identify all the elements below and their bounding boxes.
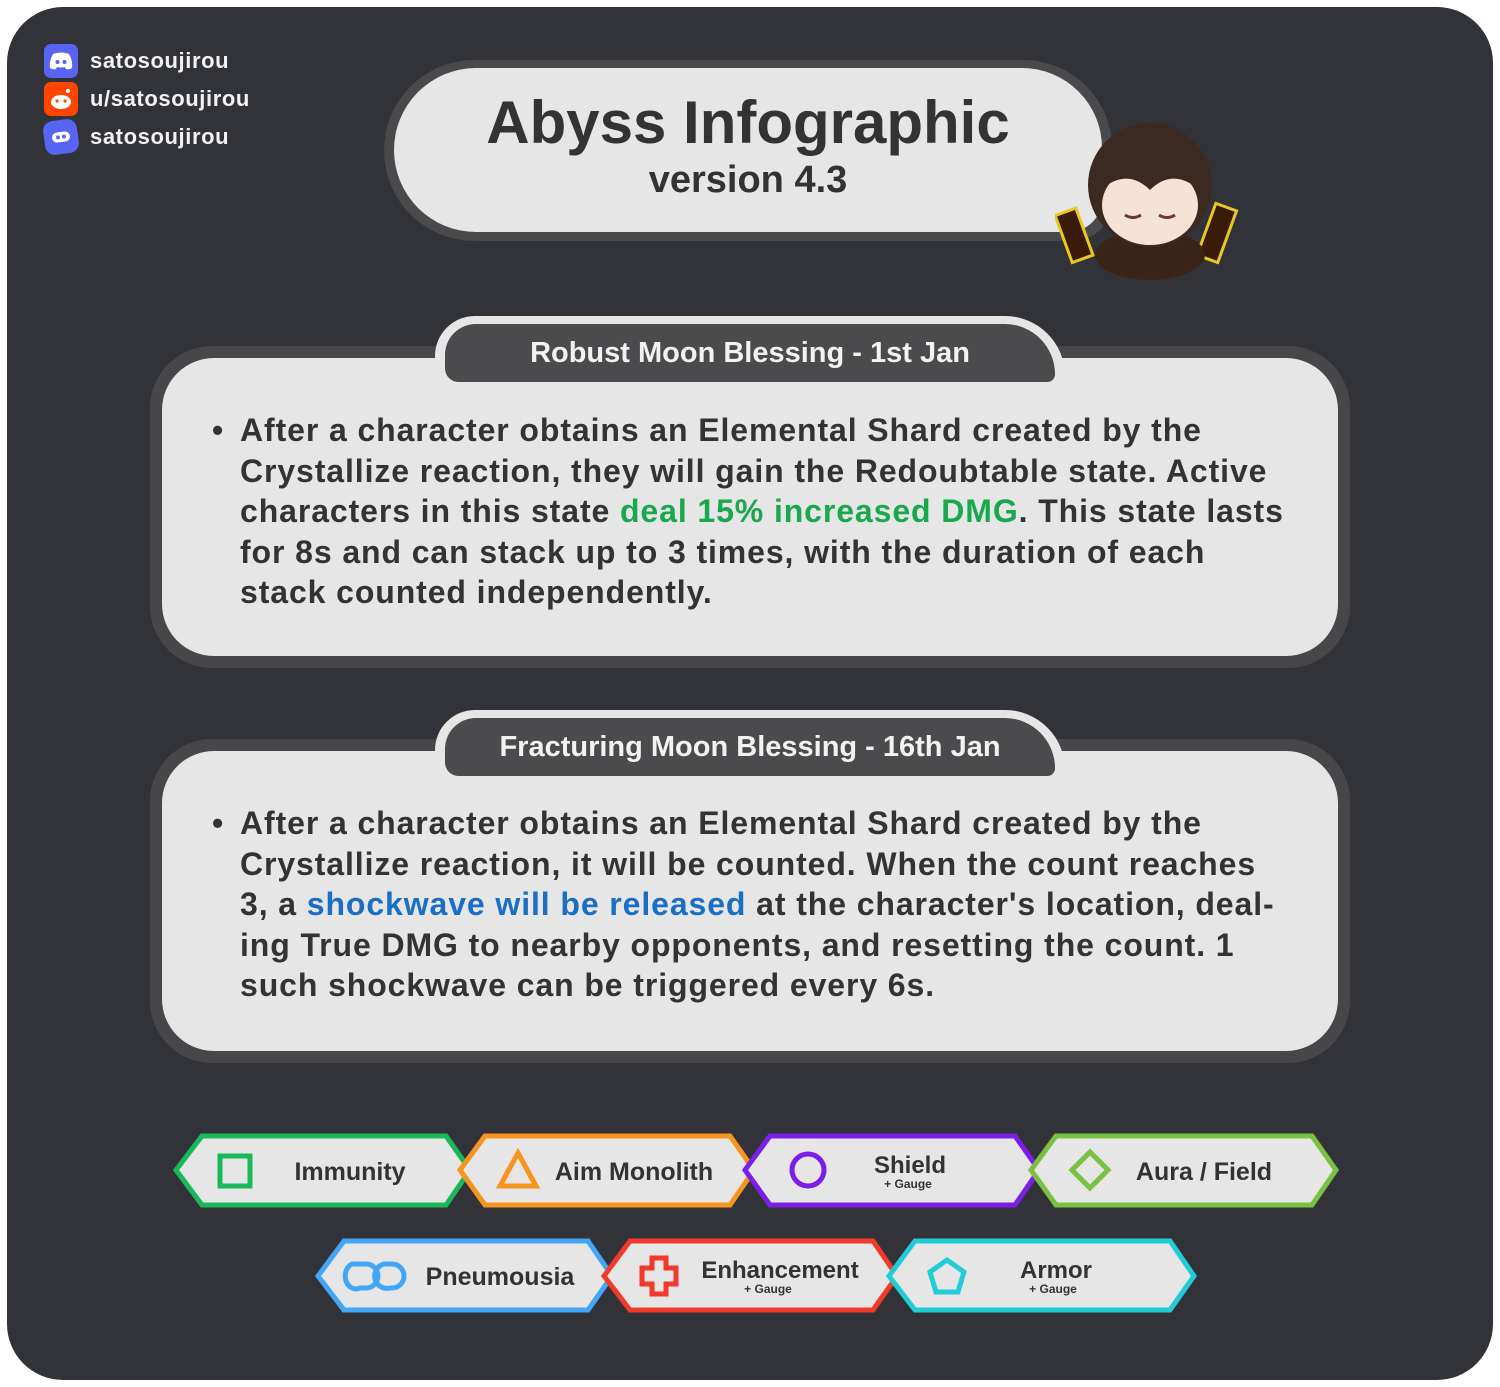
text block [212, 805, 1275, 1003]
legend: enhancement: Enhancement [701, 1257, 859, 1284]
heading: fracturing moon blessing: Fracturing Moon Blessing - 16th Jan [499, 730, 1001, 762]
text block: Crystallize reaction, it will be counted. When the count reaches [240, 846, 1256, 882]
social: reddit: u/satosoujirou [90, 86, 250, 111]
subtitle: version 4.3 [649, 159, 847, 201]
text block: for 8s and can stack up to 3 times, with the duration of each [240, 534, 1205, 570]
text block: After a character obtains an Elemental Shard created by the [240, 412, 1202, 448]
heading: fracturing moon blessing [435, 710, 1065, 786]
legend: armor: + Gauge [1029, 1282, 1077, 1296]
panel: robust moon blessing [150, 346, 1350, 668]
legend: aura field [1031, 1136, 1336, 1205]
legend: shield: + Gauge [884, 1177, 932, 1191]
text block [212, 412, 1284, 610]
text block: After a character obtains an Elemental Shard created by the [240, 805, 1202, 841]
text block: stack counted independently. [240, 574, 713, 610]
title pill [384, 60, 1112, 241]
social: discord: satosoujirou [90, 48, 229, 73]
legend: aim monolith [460, 1136, 754, 1205]
legend: immunity: Immunity [294, 1158, 406, 1186]
text block: characters in this state deal 15% increased DMG. This state lasts [240, 493, 1284, 529]
legend: shield [745, 1136, 1039, 1205]
legend: pneumousia [318, 1241, 612, 1310]
panel: robust moon blessing: • [212, 412, 224, 448]
legend: enhancement [604, 1241, 897, 1310]
icon: chibi character [1055, 123, 1238, 280]
text block: Crystallize reaction, they will gain the Redoubtable state. Active [240, 453, 1267, 489]
social: reddit [44, 82, 250, 116]
text block: 3, a shockwave will be released at the character's location, deal- [240, 886, 1275, 922]
heading: robust moon blessing [435, 316, 1065, 392]
heading: robust moon blessing: Robust Moon Blessing - 1st Jan [530, 336, 970, 368]
legend: armor: Armor [1020, 1257, 1092, 1284]
legend: aura field: Aura / Field [1136, 1158, 1272, 1186]
panel: fracturing moon blessing [150, 739, 1350, 1063]
legend: aim monolith: Aim Monolith [555, 1158, 713, 1186]
legend: pneumousia: Pneumousia [426, 1263, 575, 1291]
panel: fracturing moon blessing: • [212, 805, 224, 841]
social: discord bot: satosoujirou [90, 124, 229, 149]
legend: enhancement: + Gauge [744, 1282, 792, 1296]
legend: shield: Shield [874, 1152, 946, 1179]
title: Abyss Infographic [486, 89, 1010, 156]
legend: immunity [176, 1136, 470, 1205]
text block: such shockwave can be triggered every 6s. [240, 967, 935, 1003]
legend: armor [889, 1241, 1194, 1310]
social: discord [44, 44, 229, 78]
legend [173, 1134, 1339, 1312]
text block: ing True DMG to nearby opponents, and resetting the count. 1 [240, 927, 1234, 963]
social: discord bot [43, 119, 229, 155]
